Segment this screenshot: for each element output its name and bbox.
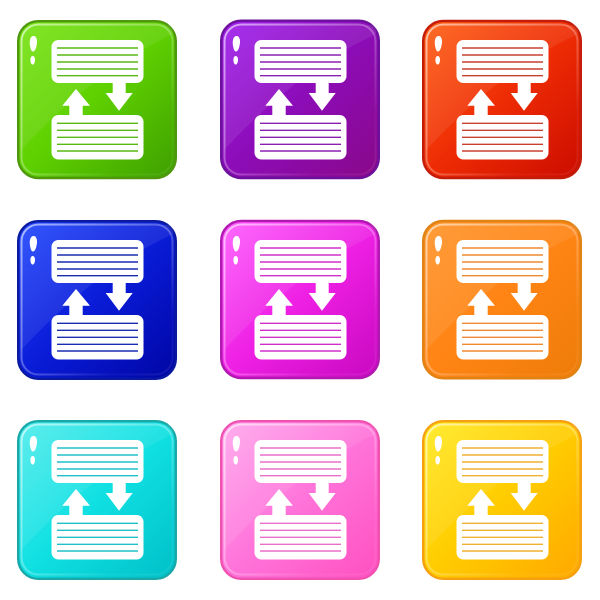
cyan tile	[18, 421, 176, 579]
bottom text box	[456, 315, 548, 360]
gloss and highlights	[21, 24, 173, 174]
top text box	[254, 40, 346, 83]
gloss and highlights	[224, 24, 376, 174]
up arrow	[62, 289, 90, 316]
gloss and highlights	[426, 24, 578, 174]
red tile	[423, 21, 581, 178]
magenta tile	[221, 221, 379, 378]
panel: blue flow icon	[18, 221, 176, 379]
top text box	[254, 240, 346, 283]
bottom text box	[52, 115, 144, 160]
down arrow	[106, 82, 133, 111]
top text box	[456, 440, 548, 483]
down arrow	[309, 282, 336, 311]
blue tile	[18, 221, 176, 379]
down arrow	[511, 82, 538, 111]
up arrow	[62, 489, 90, 516]
gloss and highlights	[426, 424, 578, 574]
top text box	[52, 240, 144, 283]
bottom text box	[456, 515, 548, 560]
panel: magenta flow icon	[221, 221, 379, 378]
gloss and highlights	[224, 424, 376, 574]
bottom text box	[456, 115, 548, 160]
down arrow	[309, 82, 336, 111]
panel: purple flow icon	[221, 21, 379, 178]
yellow tile	[423, 421, 581, 579]
gloss and highlights	[426, 224, 578, 374]
up arrow	[265, 289, 293, 316]
purple tile	[221, 21, 379, 178]
down arrow	[511, 282, 538, 311]
orange tile	[423, 221, 581, 378]
panel: pink flow icon	[221, 421, 379, 579]
top text box	[254, 440, 346, 483]
panel: orange flow icon	[423, 221, 581, 378]
panel: red flow icon	[423, 21, 581, 178]
pink tile	[221, 421, 379, 579]
gloss and highlights	[21, 224, 173, 374]
up arrow	[62, 89, 90, 116]
top text box	[456, 240, 548, 283]
up arrow	[265, 89, 293, 116]
top text box	[52, 40, 144, 83]
bottom text box	[254, 115, 346, 160]
green tile	[18, 21, 176, 178]
top text box	[52, 440, 144, 483]
bottom text box	[52, 515, 144, 560]
bottom text box	[254, 315, 346, 360]
up arrow	[467, 89, 495, 116]
gloss and highlights	[224, 224, 376, 374]
panel: green flow icon	[18, 21, 176, 178]
up arrow	[467, 489, 495, 516]
down arrow	[106, 282, 133, 311]
bottom text box	[52, 315, 144, 360]
panel: yellow flow icon	[423, 421, 581, 579]
up arrow	[265, 489, 293, 516]
down arrow	[106, 482, 133, 511]
down arrow	[309, 482, 336, 511]
gloss and highlights	[21, 424, 173, 574]
top text box	[456, 40, 548, 83]
down arrow	[511, 482, 538, 511]
up arrow	[467, 289, 495, 316]
panel: cyan flow icon	[18, 421, 176, 579]
bottom text box	[254, 515, 346, 560]
